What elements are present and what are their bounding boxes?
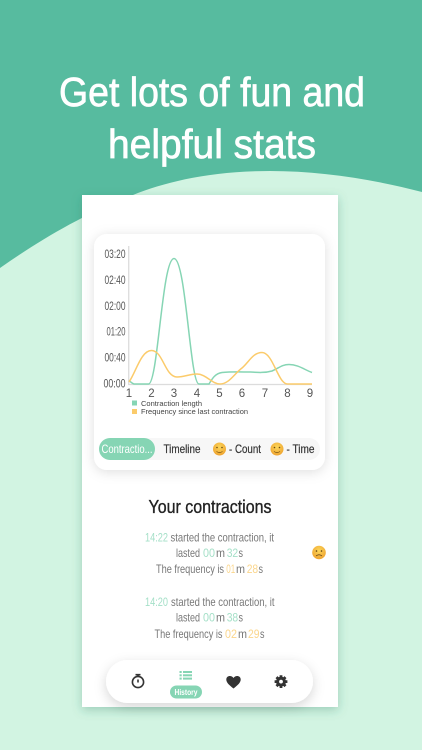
tab bar bbox=[99, 438, 320, 460]
icon: history list bbox=[180, 671, 192, 680]
panel: chart card bbox=[94, 234, 325, 470]
tab: time: - Time bbox=[286, 442, 315, 456]
tab: count bbox=[213, 442, 262, 456]
entry 1: 32 bbox=[227, 546, 238, 560]
title: Get lots of fun and bbox=[59, 69, 365, 115]
y axis labels: 00:00 bbox=[104, 378, 126, 390]
series: contraction length bbox=[129, 258, 312, 384]
tab: timeline: Timeline bbox=[164, 442, 201, 456]
history label: History bbox=[174, 687, 198, 697]
tab: count: - Count bbox=[229, 442, 262, 456]
y axis labels: 03:20 bbox=[104, 249, 126, 261]
entry 1: 00 bbox=[203, 546, 215, 560]
x axis labels: 5 bbox=[216, 388, 223, 400]
entry 2: m bbox=[238, 627, 247, 641]
entry 2: 02 bbox=[225, 627, 237, 641]
entry 2: 38 bbox=[227, 610, 238, 624]
y axis labels bbox=[104, 249, 126, 390]
entry 2: The frequency is bbox=[154, 627, 222, 641]
series: frequency bbox=[129, 350, 312, 384]
tab bar: Contractio... bbox=[102, 442, 152, 456]
bottom navigation bbox=[106, 660, 313, 703]
x axis labels: 6 bbox=[239, 388, 245, 400]
x axis labels bbox=[126, 388, 313, 400]
history label bbox=[170, 686, 202, 698]
y axis labels: 02:40 bbox=[104, 275, 126, 287]
entry 1: lasted bbox=[176, 546, 200, 560]
green header with curved edge bbox=[0, 0, 422, 268]
title bbox=[59, 69, 365, 167]
legend: Contraction length bbox=[141, 399, 202, 408]
entry 1 bbox=[145, 530, 275, 576]
entry 2: s bbox=[238, 610, 243, 624]
icon: heart bbox=[226, 676, 241, 688]
heading: Your contractions bbox=[148, 497, 272, 517]
x axis labels: 3 bbox=[171, 388, 177, 400]
entry 2: s bbox=[260, 627, 264, 641]
entry 1: 14:22 bbox=[145, 530, 168, 544]
title: helpful stats bbox=[108, 121, 316, 167]
x axis labels: 8 bbox=[284, 388, 291, 400]
icon: worried emoji bbox=[312, 546, 326, 559]
entry 1: started the contraction, it bbox=[170, 530, 275, 544]
y axis labels: 02:00 bbox=[104, 301, 126, 313]
entry 1: 01 bbox=[226, 562, 236, 576]
x axis labels: 4 bbox=[194, 388, 201, 400]
icon: settings gear bbox=[275, 675, 287, 688]
x axis labels: 2 bbox=[148, 388, 155, 400]
x axis labels: 7 bbox=[262, 388, 268, 400]
panel: phone screen bbox=[82, 195, 338, 707]
entry 2: 29 bbox=[248, 627, 260, 641]
legend bbox=[132, 399, 248, 416]
x axis labels: 1 bbox=[126, 388, 132, 400]
entry 2: 14:20 bbox=[145, 595, 168, 609]
x axis labels: 9 bbox=[307, 388, 313, 400]
tab: time bbox=[270, 442, 315, 456]
entry 2: started the contraction, it bbox=[171, 595, 275, 609]
y axis labels: 00:40 bbox=[104, 352, 126, 364]
entry 1: s bbox=[258, 562, 263, 576]
y axis labels: 01:20 bbox=[106, 326, 126, 338]
entry 1: The frequency is bbox=[156, 562, 224, 576]
entry 1: m bbox=[236, 562, 245, 576]
entry 2 bbox=[145, 595, 275, 641]
entry 2: m bbox=[216, 610, 225, 624]
line chart bbox=[104, 246, 313, 416]
entry 1: 28 bbox=[247, 562, 258, 576]
entry 1: s bbox=[238, 546, 243, 560]
legend: Frequency since last contraction bbox=[141, 407, 248, 416]
active tab bbox=[99, 438, 155, 460]
entry 2: 00 bbox=[203, 610, 215, 624]
entry 1: m bbox=[216, 546, 225, 560]
entry 2: lasted bbox=[176, 610, 200, 624]
icon: stopwatch bbox=[132, 675, 144, 688]
